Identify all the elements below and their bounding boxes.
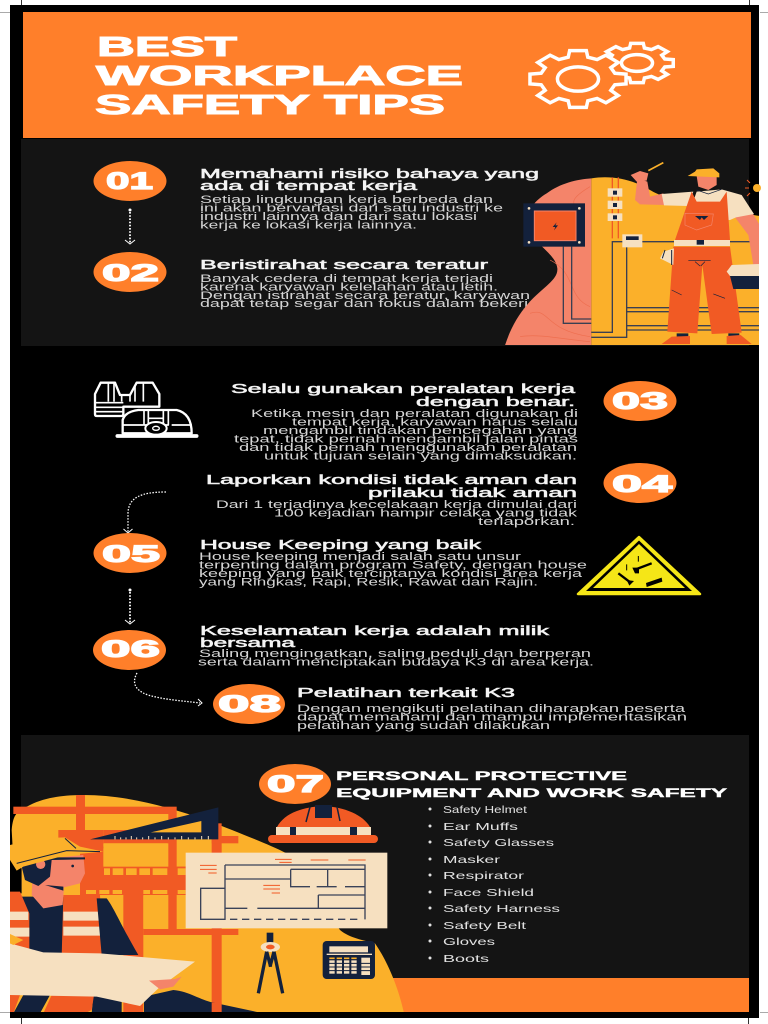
- text block 03: Ketika mesin dan peralatan digunakan di: [251, 408, 578, 420]
- badge 04: 04: [612, 471, 673, 498]
- badge 03: [604, 381, 676, 421]
- text block 08: Dengan mengikuti pelatihan diharapkan peserta: [297, 703, 685, 715]
- title: BEST: [97, 31, 237, 62]
- yellow blob: [10, 795, 404, 1013]
- text block 06: [198, 624, 594, 668]
- compass: [258, 933, 283, 993]
- badge 03: 03: [612, 388, 668, 415]
- text block 04: prilaku tidak aman: [368, 486, 577, 500]
- worker: [631, 163, 761, 344]
- text block 03: [231, 382, 579, 462]
- salmon blob: [505, 178, 591, 345]
- arrow 06 to 08: [135, 673, 202, 706]
- text block 02: karena karyawan kelelahan atau letih.: [200, 282, 498, 294]
- text block 03: tepat, tidak pernah mengambil jalan pintas: [234, 434, 579, 446]
- text block 05: yang Ringkas, Rapi, Resik, Rawat dan Rajin.: [199, 576, 538, 588]
- text block 05: House keeping menjadi salah satu unsur: [199, 551, 522, 563]
- badge 06: 06: [101, 636, 160, 663]
- heading 07: EQUIPMENT AND WORK SAFETY: [336, 786, 727, 800]
- badge 02: 02: [102, 260, 159, 287]
- arrow 05 to 06: [125, 588, 135, 624]
- text block 05: keeping yang baik terciptanya kondisi area kerja: [199, 568, 582, 580]
- equipment list: Gloves: [443, 936, 495, 948]
- engineer: [10, 837, 263, 1013]
- text block 04: Laporkan kondisi tidak aman dan: [206, 473, 577, 487]
- equipment list: Safety Belt: [443, 920, 526, 932]
- title: SAFETY TIPS: [95, 89, 445, 120]
- badge 01: 01: [106, 168, 153, 195]
- equipment list: Ear Muffs: [443, 821, 518, 833]
- icon: vest and helmet: [95, 383, 197, 436]
- equipment list: [428, 803, 560, 965]
- text block 01: [200, 167, 539, 232]
- equipment list: Safety Glasses: [443, 837, 554, 849]
- text block 06: Keselamatan kerja adalah milik: [200, 624, 550, 638]
- text block 05: terpenting dalam program Safety, dengan house: [199, 560, 587, 572]
- paper plan: [10, 943, 195, 1006]
- badge 01: [94, 161, 166, 201]
- badge 08: [213, 684, 285, 724]
- text block 05: [199, 538, 587, 588]
- heading 07: PERSONAL PROTECTIVE: [336, 769, 627, 783]
- text block 01: kerja ke lokasi kerja lainnya.: [200, 220, 417, 232]
- badge 07: 07: [267, 771, 324, 798]
- icon: falling objects warning sign: [578, 537, 700, 594]
- text block 01: ini akan bervariasi dari satu industri ke: [200, 202, 503, 214]
- heading 07: [336, 769, 727, 800]
- text block 06: serta dalam menciptakan budaya K3 di area kerja.: [198, 656, 594, 668]
- badge 04: [604, 463, 676, 503]
- text block 03: dengan benar.: [416, 395, 575, 409]
- blueprint: [186, 853, 387, 928]
- text block 02: Dengan istirahat secara teratur, karyawan: [200, 290, 530, 302]
- wires: [563, 242, 760, 337]
- switches: [608, 188, 642, 247]
- text block 04: [206, 473, 578, 528]
- equipment list: Respirator: [443, 870, 525, 882]
- badge 05: 05: [102, 541, 160, 568]
- icon: gears: [530, 43, 673, 107]
- badge 08: 08: [218, 691, 281, 718]
- badge 05: [94, 533, 166, 573]
- text block 01: ada di tempat kerja: [200, 179, 417, 193]
- equipment list: Masker: [443, 854, 501, 866]
- illustration: engineer with blueprint: [10, 795, 404, 1013]
- ruler: [90, 807, 218, 839]
- equipment list: Safety Harness: [443, 903, 560, 915]
- text block 01: Memahami risiko bahaya yang: [200, 167, 539, 181]
- text block 02: Beristirahat secara teratur: [200, 258, 488, 272]
- text block 03: Selalu gunakan peralatan kerja: [231, 382, 575, 396]
- calculator: [323, 941, 375, 979]
- text block 08: pelatihan yang sudah dilakukan: [297, 720, 550, 732]
- icon: orange hard hat: [268, 805, 378, 843]
- text block 08: Pelatihan terkait K3: [297, 686, 515, 700]
- text block 01: Setiap lingkungan kerja berbeda dan: [200, 194, 493, 206]
- equipment list: Boots: [443, 953, 489, 965]
- header panel: [23, 12, 751, 138]
- text block 08: [297, 686, 687, 732]
- title: WORKPLACE: [96, 60, 463, 91]
- text block 06: bersama: [200, 636, 295, 650]
- text block 05: House Keeping yang baik: [200, 538, 482, 552]
- equipment list: Face Shield: [443, 887, 534, 899]
- text block 02: Banyak cedera di tempat kerja terjadi: [200, 273, 493, 285]
- equipment list: Safety Helmet: [443, 803, 528, 816]
- electrical box: [523, 203, 585, 247]
- text block 04: terlaporkan.: [478, 516, 575, 528]
- text block 03: tempat kerja, karyawan harus selalu: [292, 416, 578, 428]
- title: [95, 31, 463, 120]
- text block 01: industri lainnya dan dari satu lokasi: [200, 211, 477, 223]
- icon: small spark: [745, 180, 761, 196]
- yellow wall: [591, 177, 760, 345]
- text block 06: Saling mengingatkan, saling peduli dan berperan: [199, 648, 591, 660]
- scaffolding: [13, 795, 238, 1013]
- text block 08: dapat memahami dan mampu implementasikan: [297, 712, 687, 724]
- text block 03: mengambil tindakan pencegahan yang: [263, 425, 577, 437]
- badge 02: [94, 252, 166, 292]
- panel: tips 01 and 02: [21, 139, 749, 346]
- arrow 04 to 05: [124, 492, 166, 533]
- text block 03: dan tidak pernah menggunakan peralatan: [239, 442, 577, 454]
- text block 04: Dari 1 terjadinya kecelakaan kerja dimulai dari: [216, 499, 577, 511]
- text block 02: dapat tetap segar dan fokus dalam bekerja: [200, 298, 538, 310]
- text block 04: 100 kejadian hampir celaka yang tidak: [274, 508, 578, 520]
- arrow 01 to 02: [125, 208, 135, 244]
- text block 02: [200, 258, 538, 310]
- badge 06: [93, 630, 166, 670]
- panel: personal protective equipment: [10, 735, 749, 1013]
- text block 03: untuk tujuan selain yang dimaksudkan.: [264, 450, 577, 462]
- illustration: electrician at panel: [505, 163, 761, 345]
- badge 07: [259, 764, 331, 804]
